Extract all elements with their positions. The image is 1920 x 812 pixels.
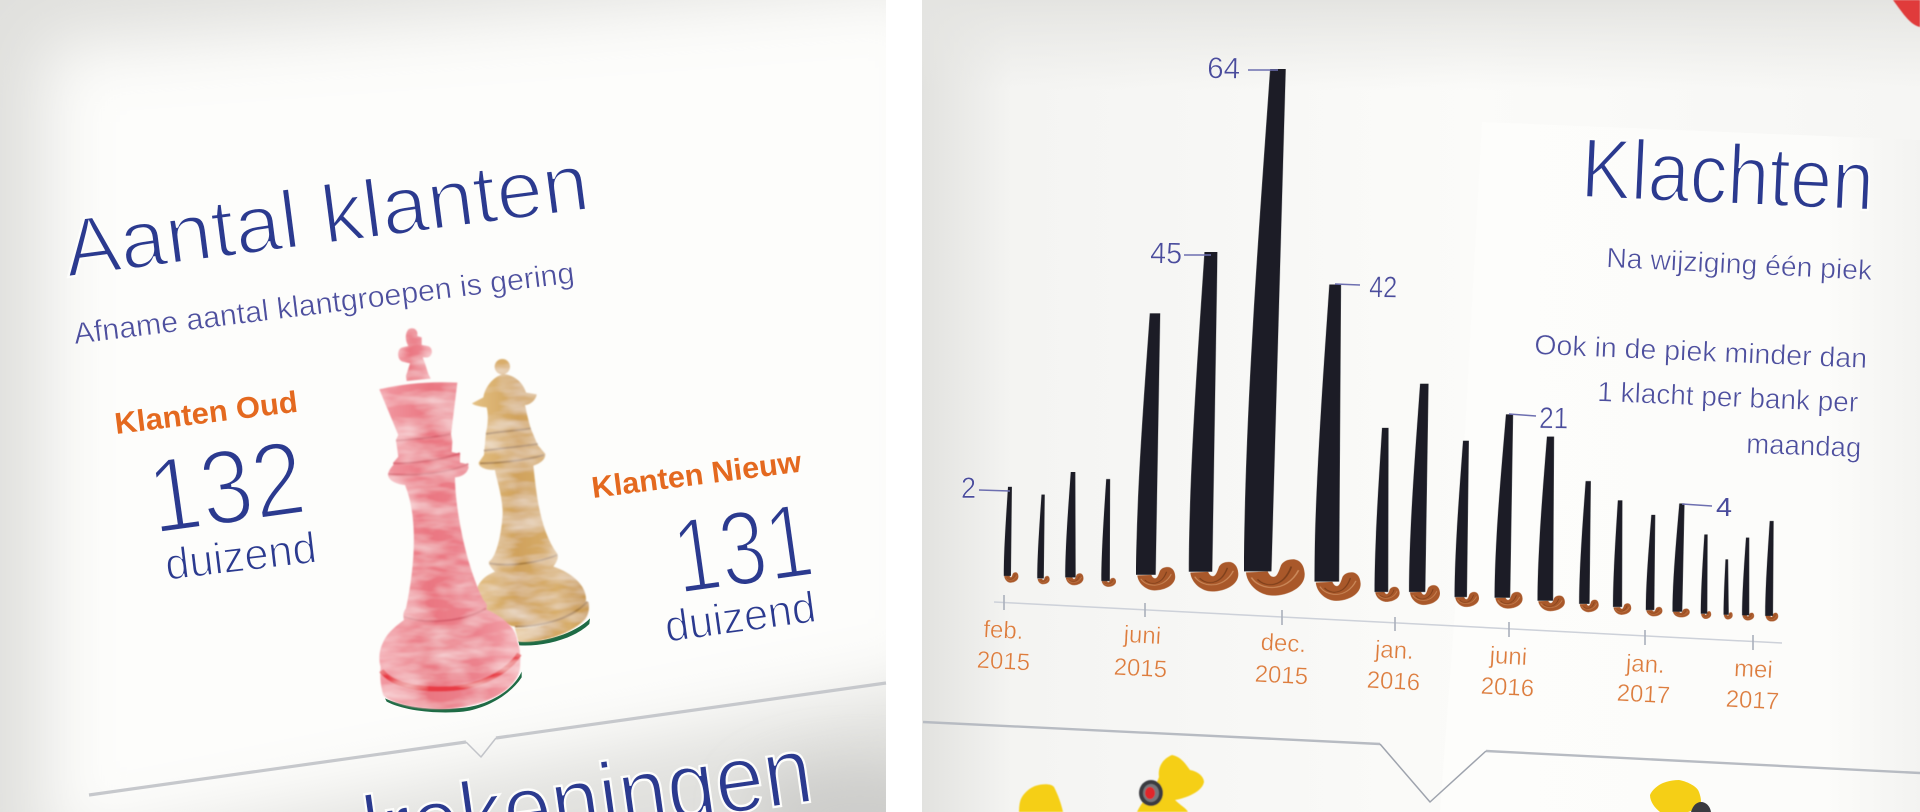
value: 132: 132 <box>141 418 312 557</box>
value label: 4 <box>1682 492 1732 522</box>
value: 131: 131 <box>666 481 820 617</box>
icon: yellow figure left <box>1019 784 1063 812</box>
axis label: mei 2017: mei <box>1733 655 1773 684</box>
title: Klachten: Klachten <box>1579 121 1876 229</box>
bar: sep 2016 <box>1613 500 1631 615</box>
value label: 2: 2 <box>961 472 976 505</box>
axis label: juni 2016: 2016 <box>1480 673 1535 702</box>
axis label: juni 2016 <box>1480 642 1535 702</box>
unit: duizend nieuw: duizend <box>662 583 819 652</box>
value label: 2 <box>961 472 1010 505</box>
title: Aantal klanten: Aantal klanten <box>59 137 594 295</box>
value label: 64: 64 <box>1207 52 1240 86</box>
text block: toelichting klachten: 1 klacht per bank per <box>1597 376 1859 418</box>
bar: juli 2016 <box>1537 437 1565 611</box>
text block: toelichting klachten: Ook in de piek minder dan <box>1534 329 1868 374</box>
bar: maart 2017 <box>1742 538 1754 620</box>
bar: april 2015 <box>1065 472 1083 585</box>
bar: mei 2017 <box>1765 521 1778 621</box>
bar: 42 <box>1314 284 1361 601</box>
axis label: jan. 2016: 2016 <box>1366 667 1421 696</box>
bar: mei 2015 <box>1101 479 1116 587</box>
bar: okt 2016 <box>1646 515 1662 616</box>
panel: right background <box>922 0 1920 812</box>
icon: chess queen <box>472 359 590 645</box>
value label: 4: 4 <box>1716 492 1732 522</box>
bar: 45 <box>1189 252 1238 591</box>
bar: juni 2015 <box>1136 313 1175 590</box>
axis label: mei 2017 <box>1725 655 1780 715</box>
text block: toelichting klachten: maandag <box>1746 428 1862 463</box>
axis label: jan. 2017 <box>1616 650 1671 709</box>
value label: 42 <box>1335 271 1397 304</box>
axis label: dec. 2015: 2015 <box>1254 661 1309 690</box>
divider: right speech line <box>923 722 1920 802</box>
icon: yellow figure middle <box>1137 755 1204 812</box>
value label: 45: 45 <box>1150 237 1182 271</box>
bar: feb 2017 <box>1724 559 1733 619</box>
bar: aug 2016 <box>1579 481 1599 612</box>
subtitle: Na wijziging een piek: Na wijziging één piek <box>1606 242 1874 286</box>
axis label: juni 2015: 2015 <box>1113 654 1168 683</box>
value label: 42: 42 <box>1369 271 1397 304</box>
panel: white gutter <box>886 0 922 812</box>
icon: red button <box>1139 780 1163 806</box>
icon: red object corner <box>1893 0 1920 27</box>
axis label: feb. 2015: 2015 <box>976 647 1031 676</box>
chart: hockey stick bars <box>1004 69 1778 621</box>
bar: jan 2017 <box>1701 534 1711 619</box>
bar: maart 2015 <box>1037 495 1050 584</box>
axis label: mei 2017: 2017 <box>1725 686 1780 715</box>
axis label: juni 2015 <box>1113 621 1168 683</box>
axis label: dec. 2015 <box>1254 629 1309 690</box>
axis label: jan. 2017: jan. <box>1624 650 1665 679</box>
axis label: jan. 2017: 2017 <box>1616 680 1671 709</box>
bar: 21 juni 2016 <box>1495 414 1523 609</box>
bar: 2 feb 2015 <box>1004 487 1018 583</box>
bar: 4 <box>1672 503 1690 617</box>
axis label: juni 2016: juni <box>1488 642 1528 671</box>
axis label: feb. 2015 <box>976 616 1031 676</box>
value label: 45 <box>1150 237 1211 271</box>
icon: chess king <box>379 328 522 713</box>
icon: yellow figure right <box>1650 780 1711 812</box>
value label: 64 <box>1207 52 1278 86</box>
axis label: feb. 2015: feb. <box>983 616 1024 645</box>
icon: chess pieces <box>379 328 590 713</box>
bar: maart 2016 <box>1455 441 1479 607</box>
bar: jan 2016 <box>1375 428 1400 602</box>
divider: left speech line <box>89 683 886 795</box>
axis label: jan. 2016 <box>1366 636 1421 696</box>
label: Klanten Nieuw: Klanten Nieuw <box>590 446 804 505</box>
subtitle: Afname aantal klantgroepen is gering: Afname aantal klantgroepen is gering <box>72 257 576 351</box>
axis label: dec. 2015: dec. <box>1260 629 1307 658</box>
axis label: jan. 2016: jan. <box>1373 636 1414 665</box>
unit: duizend oud: duizend <box>162 523 319 590</box>
value label: 21 <box>1509 402 1568 436</box>
panel: left background <box>0 0 970 812</box>
bar: 64 dec 2015 <box>1244 69 1305 596</box>
chart: time axis <box>994 595 1782 650</box>
label: Klanten Oud: Klanten Oud <box>113 386 299 441</box>
text block: toelichting klachten <box>1534 329 1868 463</box>
value label: 21: 21 <box>1539 402 1568 436</box>
axis label: juni 2015: juni <box>1122 621 1162 650</box>
bar: feb 2016 <box>1409 384 1440 605</box>
